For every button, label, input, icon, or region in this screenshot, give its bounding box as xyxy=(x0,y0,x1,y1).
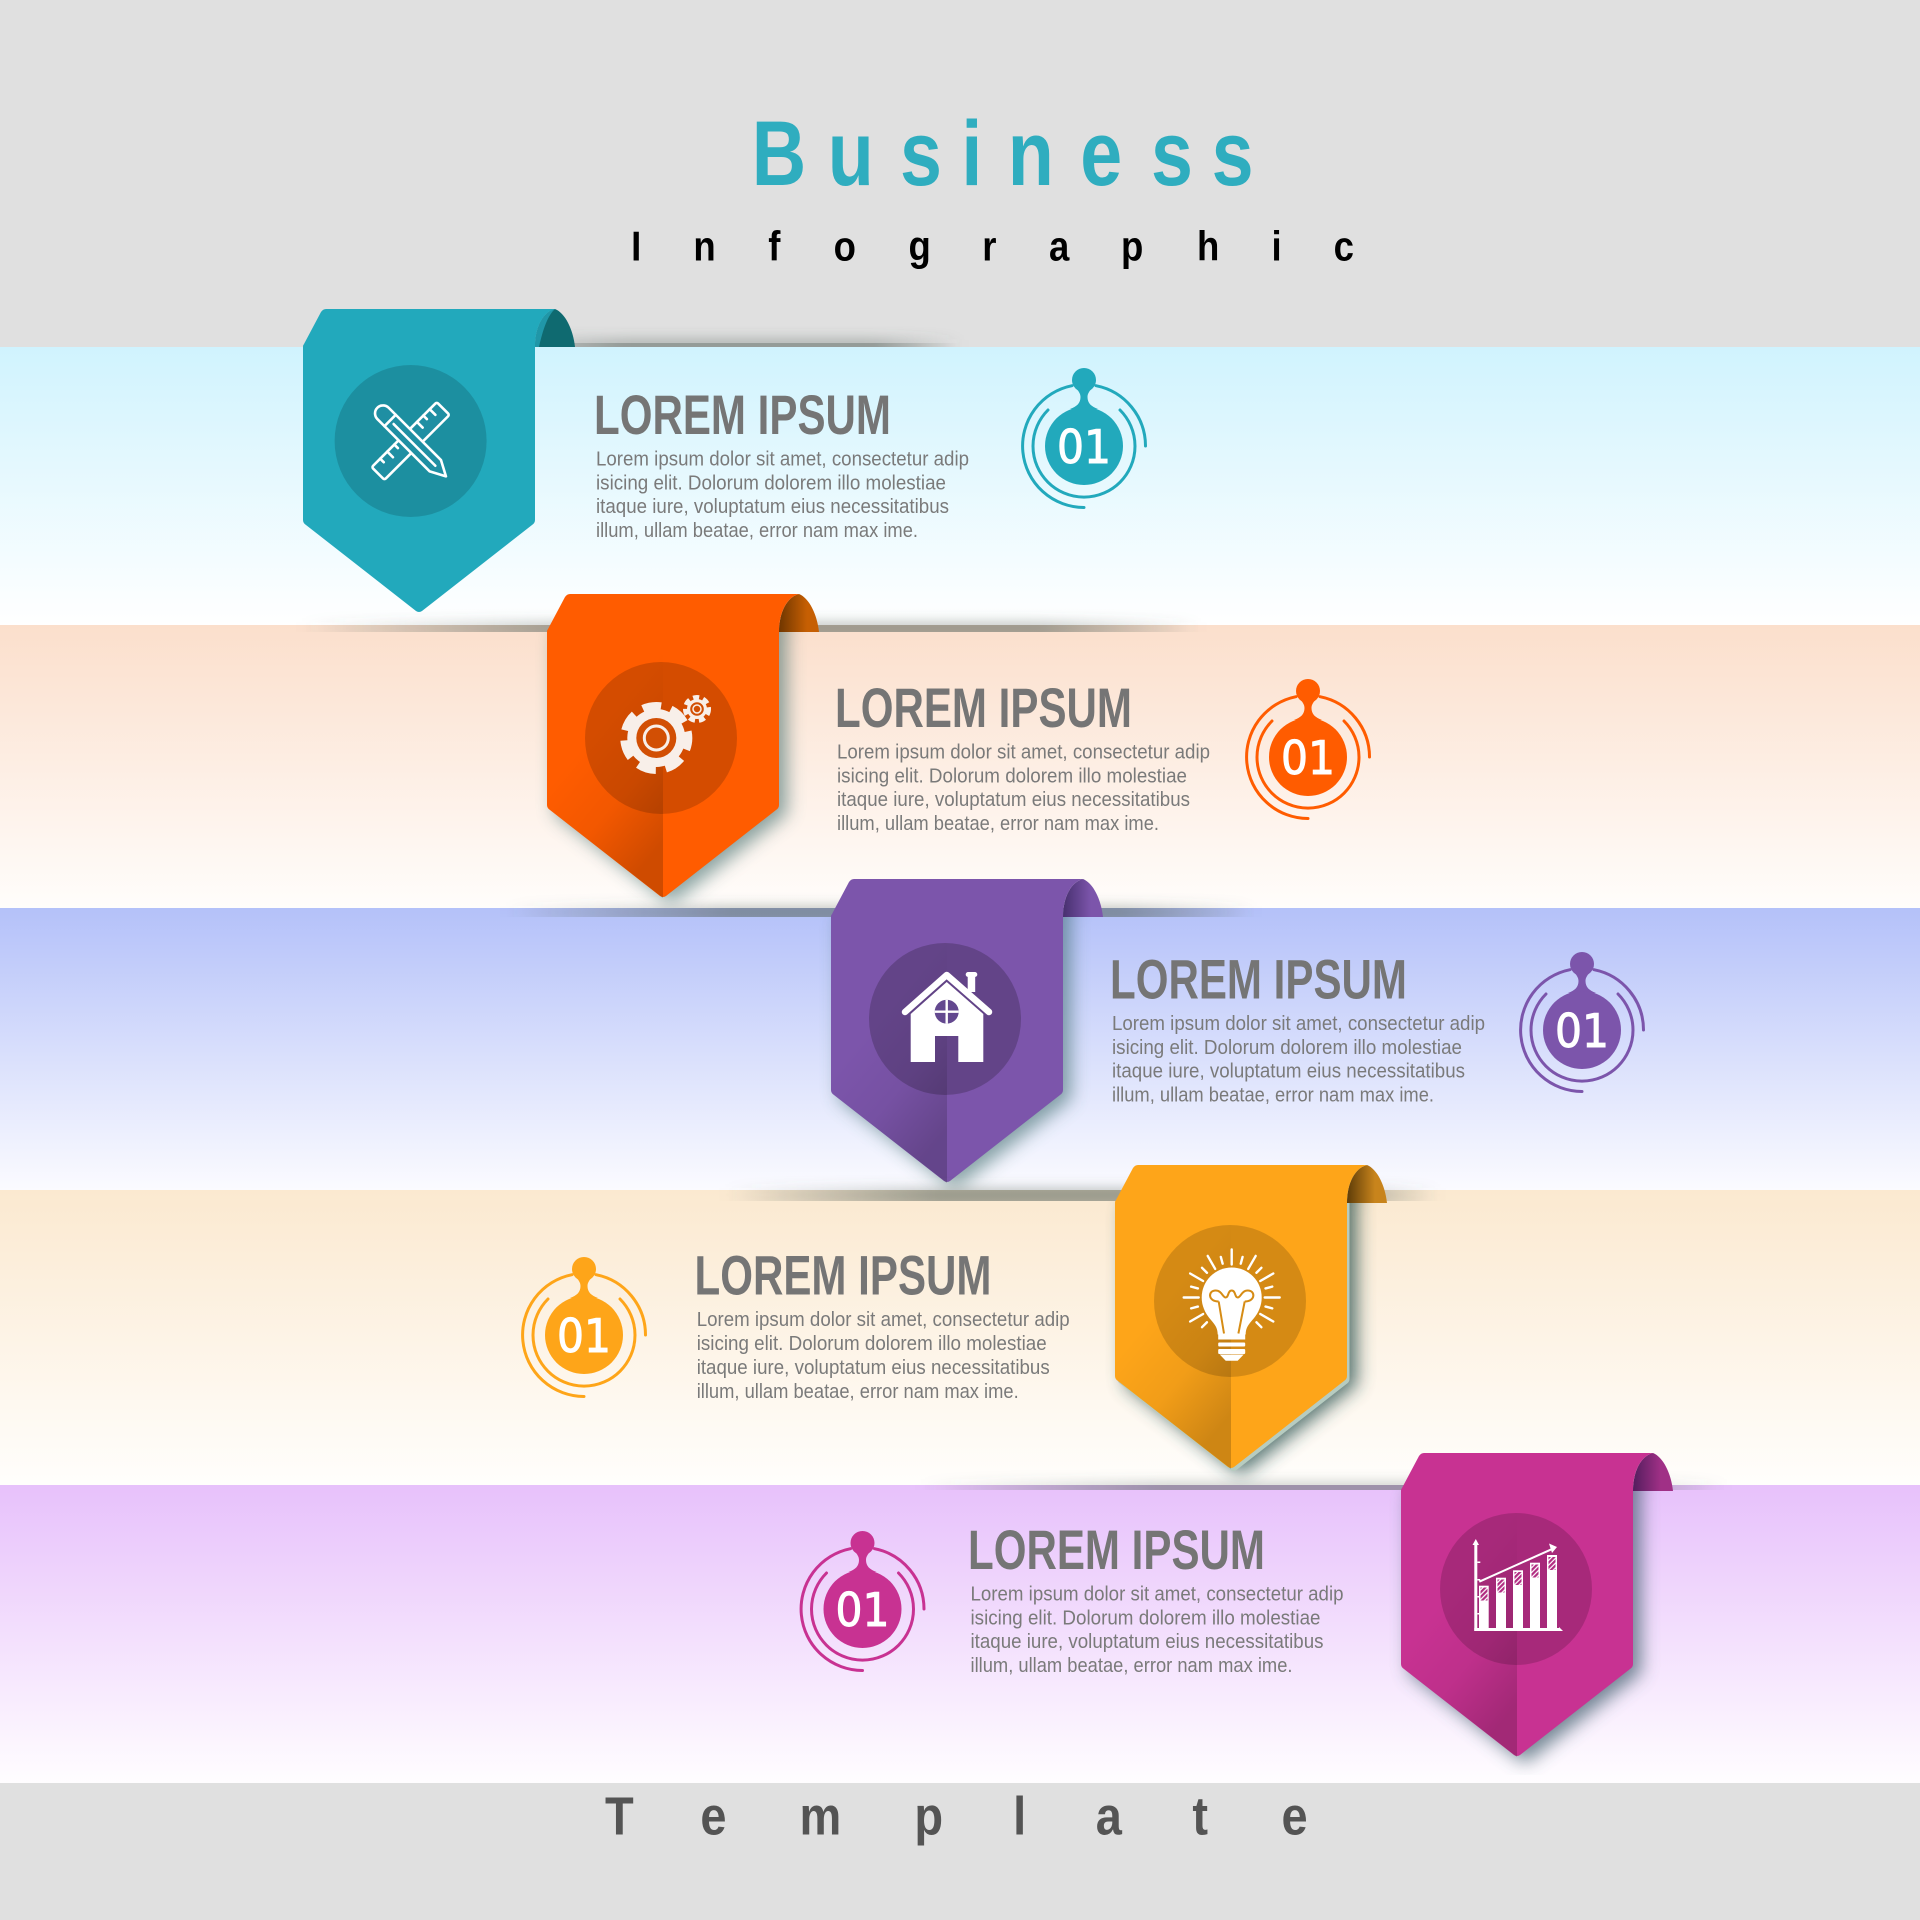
text block 2: isicing elit. Dolorum dolorem illo molestiae xyxy=(837,764,1187,787)
panel: step 5 xyxy=(0,1453,1920,1783)
text block 2: Lorem ipsum dolor sit amet, consectetur adip xyxy=(837,740,1210,763)
text block 5: illum, ullam beatae, error nam max ime. xyxy=(970,1654,1292,1677)
shadow strip band 2 xyxy=(300,622,1200,634)
ribbon: amber xyxy=(1115,1165,1387,1474)
number badge 1: 01 xyxy=(1057,420,1111,474)
text block 3: isicing elit. Dolorum dolorem illo molestiae xyxy=(1112,1036,1462,1059)
number badge 4: 01 xyxy=(557,1309,611,1363)
panel: step 1 xyxy=(0,309,1920,625)
text block 4: itaque iure, voluptatum eius necessitatibus xyxy=(697,1356,1050,1379)
panel: step 3 xyxy=(0,879,1920,1190)
text block 3: illum, ullam beatae, error nam max ime. xyxy=(1112,1084,1434,1106)
text block 5: LOREM IPSUM xyxy=(968,1518,1265,1581)
shadow strip band 5 xyxy=(920,1483,1725,1492)
number badge 5: 01 xyxy=(836,1583,890,1637)
text block 1: Lorem ipsum dolor sit amet, consectetur adip xyxy=(596,447,969,470)
band 2 background xyxy=(0,625,1920,908)
text block 3: LOREM IPSUM xyxy=(1110,947,1407,1010)
icon: bar chart xyxy=(1472,1539,1563,1631)
panel: step 4 xyxy=(0,1165,1920,1485)
text block 3: Lorem ipsum dolor sit amet, consectetur adip xyxy=(1112,1012,1485,1035)
number badge 3 xyxy=(1521,952,1644,1092)
text block 4: isicing elit. Dolorum dolorem illo molestiae xyxy=(697,1332,1047,1355)
icon: gears xyxy=(620,698,708,775)
band 4 background xyxy=(0,1190,1920,1485)
text block 1: itaque iure, voluptatum eius necessitatibus xyxy=(596,495,949,518)
ribbon: teal xyxy=(303,309,575,612)
band 3 background xyxy=(0,908,1920,1190)
text block 4: LOREM IPSUM xyxy=(694,1244,992,1307)
title: Business: Business xyxy=(752,102,1254,205)
text block 3 xyxy=(1110,947,1485,1106)
ribbon: orange xyxy=(547,594,819,903)
text block 2: itaque iure, voluptatum eius necessitatibus xyxy=(837,788,1190,811)
text block 5: itaque iure, voluptatum eius necessitatibus xyxy=(970,1630,1324,1653)
number badge 5 xyxy=(801,1531,924,1670)
text block 2: LOREM IPSUM xyxy=(835,676,1132,739)
shadow strip band 3 xyxy=(505,906,1255,919)
subtitle: Infographic: Infographic xyxy=(631,223,1354,270)
ribbon: purple xyxy=(831,879,1103,1188)
panel: step 2 xyxy=(0,594,1920,908)
band 5 background xyxy=(0,1485,1920,1783)
ribbon: magenta xyxy=(1401,1453,1673,1762)
text block 2 xyxy=(835,676,1210,835)
shadow strip band 4 xyxy=(725,1188,1438,1202)
icon: light bulb xyxy=(1184,1250,1280,1361)
footer: Template: Template xyxy=(605,1786,1308,1846)
icon: house xyxy=(905,972,989,1062)
shadow strip above band 1 xyxy=(480,339,960,351)
text block 1: LOREM IPSUM xyxy=(594,383,891,446)
text block 1 xyxy=(594,383,969,542)
text block 3: itaque iure, voluptatum eius necessitatibus xyxy=(1112,1060,1465,1082)
icon: pencil and ruler xyxy=(372,402,452,482)
number badge 4 xyxy=(523,1257,646,1396)
number badge 1 xyxy=(1023,368,1146,508)
text block 5: isicing elit. Dolorum dolorem illo molestiae xyxy=(970,1606,1320,1629)
text block 4: Lorem ipsum dolor sit amet, consectetur adip xyxy=(697,1308,1070,1331)
text block 5: Lorem ipsum dolor sit amet, consectetur adip xyxy=(970,1582,1344,1605)
number badge 2: 01 xyxy=(1281,731,1335,785)
band 1 background xyxy=(0,347,1920,625)
text block 5 xyxy=(968,1518,1344,1677)
text block 1: illum, ullam beatae, error nam max ime. xyxy=(596,519,918,542)
text block 2: illum, ullam beatae, error nam max ime. xyxy=(837,812,1159,835)
text block 1: isicing elit. Dolorum dolorem illo molestiae xyxy=(596,471,946,494)
number badge 2 xyxy=(1247,679,1370,818)
number badge 3: 01 xyxy=(1555,1004,1609,1058)
text block 4 xyxy=(694,1244,1070,1403)
text block 4: illum, ullam beatae, error nam max ime. xyxy=(697,1380,1019,1403)
